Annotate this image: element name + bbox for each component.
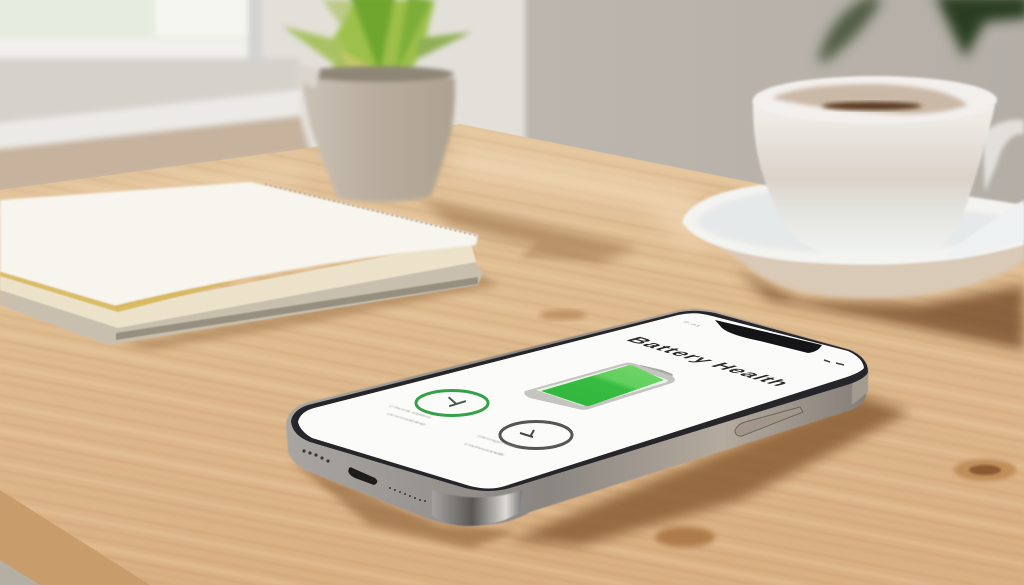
coffee cup	[753, 76, 1024, 258]
side button	[735, 407, 803, 436]
background wall	[0, 0, 1024, 260]
phone metal body	[286, 309, 868, 526]
sunlight patches on table	[0, 140, 760, 250]
coffee saucer	[682, 185, 1024, 298]
phone bezel	[291, 311, 868, 491]
phone screen	[298, 313, 864, 488]
table front edge	[0, 490, 150, 585]
wood grain	[0, 124, 1024, 585]
phone right corner	[852, 368, 868, 405]
phone notch	[715, 320, 822, 353]
caption under green clock	[385, 405, 434, 426]
wood knots	[539, 310, 1016, 547]
caption under green clock: Check status	[387, 405, 434, 419]
phone bottom corner	[432, 490, 522, 526]
smartphone	[286, 309, 868, 526]
caption under gray clock	[462, 435, 520, 456]
plant pot	[294, 66, 455, 202]
clock icon: gray	[500, 422, 572, 448]
caption under gray clock: Storage and	[475, 435, 520, 448]
clock icon: green	[416, 390, 488, 416]
caption under green clock: of remaining	[385, 413, 428, 426]
distant leaves	[818, 0, 1024, 62]
status bar: 9:41	[681, 321, 704, 327]
window and sill	[0, 0, 525, 195]
notebook	[0, 182, 483, 345]
caption under gray clock: Cached details	[462, 443, 507, 456]
table top	[0, 124, 1024, 585]
battery icon	[524, 363, 675, 410]
shadows on table	[120, 198, 1024, 548]
phone speaker and port	[302, 449, 426, 502]
heading: Battery Health: Battery Health	[620, 335, 796, 388]
plant leaves	[282, 0, 472, 75]
